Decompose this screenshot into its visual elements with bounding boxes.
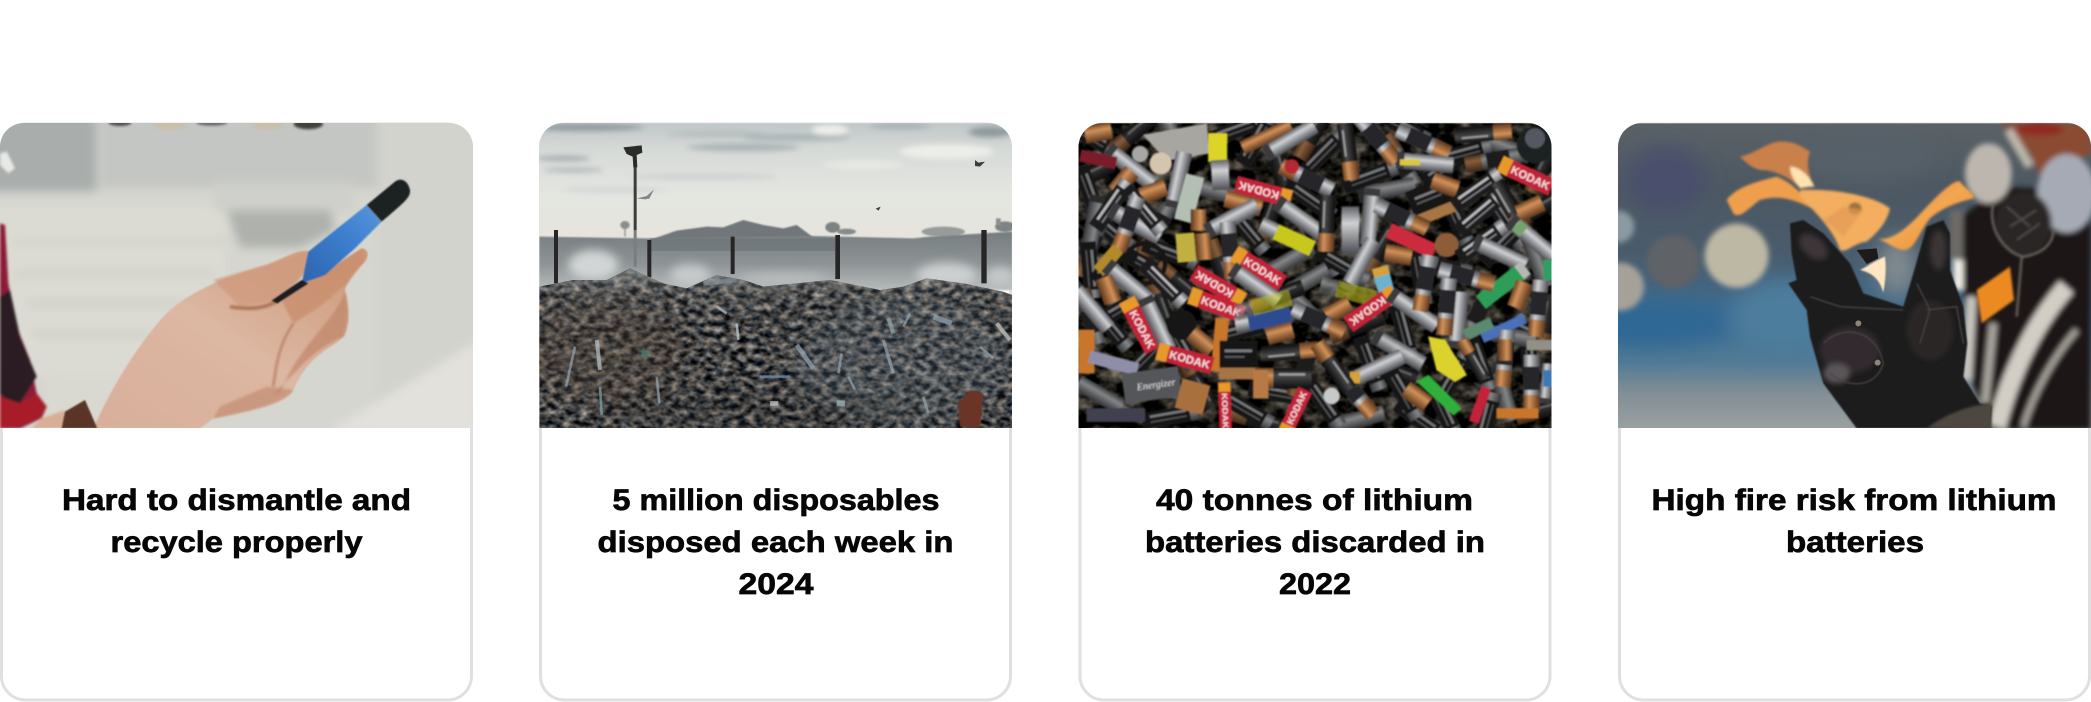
panel: 5 million disposables xyxy=(523,123,1015,700)
litter streaks xyxy=(566,280,1010,415)
heading: high fire risk xyxy=(1652,484,2056,559)
panel: high fire risk xyxy=(1618,122,2091,702)
heading: high fire risk: High fire risk from lithium xyxy=(1652,484,2056,517)
heading: 40 tonnes of lithium: 2022 xyxy=(1279,568,1351,601)
heading: hard to dismantle xyxy=(62,484,411,559)
heading: 40 tonnes of lithium: 40 tonnes of lithium xyxy=(1156,484,1473,517)
heading: 5 million disposables xyxy=(598,484,954,601)
heading: hard to dismantle: Hard to dismantle and xyxy=(62,484,411,517)
heading: high fire risk: batteries xyxy=(1786,526,1924,559)
heading: hard to dismantle: recycle properly xyxy=(110,526,363,559)
photo: burning gloved hand xyxy=(1618,123,2091,428)
card frame xyxy=(540,124,1010,700)
flames xyxy=(1727,142,1974,251)
photo: smoking landfill of discarded waste xyxy=(523,123,1015,433)
heading: 40 tonnes of lithium xyxy=(1145,484,1485,601)
heading: 5 million disposables: 5 million disposables xyxy=(612,484,940,517)
heading: 5 million disposables: 2024 xyxy=(738,568,814,601)
fence posts xyxy=(554,230,987,283)
waste mound xyxy=(539,268,1012,430)
panel: 40 tonnes of lithium batteries xyxy=(1058,101,1573,700)
birds xyxy=(637,160,985,211)
heading: 5 million disposables: disposed each week in xyxy=(598,526,954,559)
photo: pile of used batteries xyxy=(1078,123,1552,428)
card frame xyxy=(1620,124,2090,700)
glove xyxy=(1788,220,1992,428)
card frame xyxy=(1080,124,1550,700)
photo: hand holding a blue disposable vape xyxy=(0,110,483,433)
card frame xyxy=(2,124,472,700)
photo: pile of used batteries: Energizer xyxy=(1135,377,1176,393)
heading: 40 tonnes of lithium: batteries discarded in xyxy=(1145,526,1485,559)
biker body and chrome xyxy=(1957,123,2091,430)
floodlight pole xyxy=(623,145,642,267)
panel: hard to dismantle and recycle xyxy=(0,110,483,700)
